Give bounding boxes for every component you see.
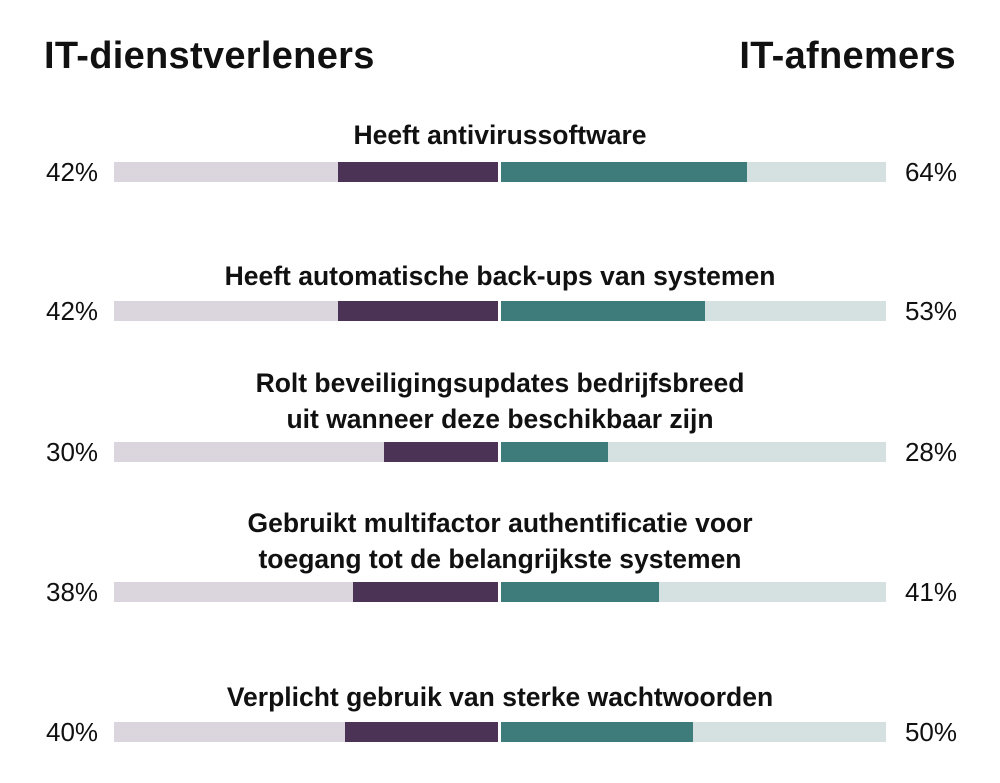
- label: passwords: Verplicht gebruik van sterke wachtwoorden: [227, 682, 773, 712]
- row: antivirus bars: 42%: [46, 157, 98, 187]
- row: password bars: 40%: [46, 717, 98, 747]
- row: password bars: 50%: [905, 717, 957, 747]
- label: antivirus: Heeft antivirussoftware: [353, 120, 647, 150]
- row: updates bars: [46, 437, 957, 467]
- label: MFA: Gebruikt multifactor authentificatie voor: [247, 508, 753, 538]
- label: updates: Rolt beveiligingsupdates bedrijfsbreed: [256, 368, 744, 398]
- title: IT-dienstverleners: IT-dienstverleners: [44, 35, 375, 77]
- label: updates: uit wanneer deze beschikbaar zijn: [286, 404, 714, 434]
- row: updates bars: 28%: [905, 437, 957, 467]
- label: MFA: [247, 508, 753, 574]
- row: password bars: [46, 717, 957, 747]
- row: back-ups bars: [46, 296, 957, 326]
- row: back-ups bars: 53%: [905, 296, 957, 326]
- row: MFA bars: [46, 577, 957, 607]
- row: MFA bars: 41%: [905, 577, 957, 607]
- label: back-ups: Heeft automatische back-ups van systemen: [225, 261, 775, 291]
- row: antivirus bars: [46, 157, 957, 187]
- row: back-ups bars: 42%: [46, 296, 98, 326]
- label: MFA: toegang tot de belangrijkste systemen: [258, 544, 742, 574]
- row: antivirus bars: 64%: [905, 157, 957, 187]
- label: updates: [256, 368, 744, 434]
- row: MFA bars: 38%: [46, 577, 98, 607]
- title: IT-afnemers: IT-afnemers: [739, 35, 956, 77]
- row: updates bars: 30%: [46, 437, 98, 467]
